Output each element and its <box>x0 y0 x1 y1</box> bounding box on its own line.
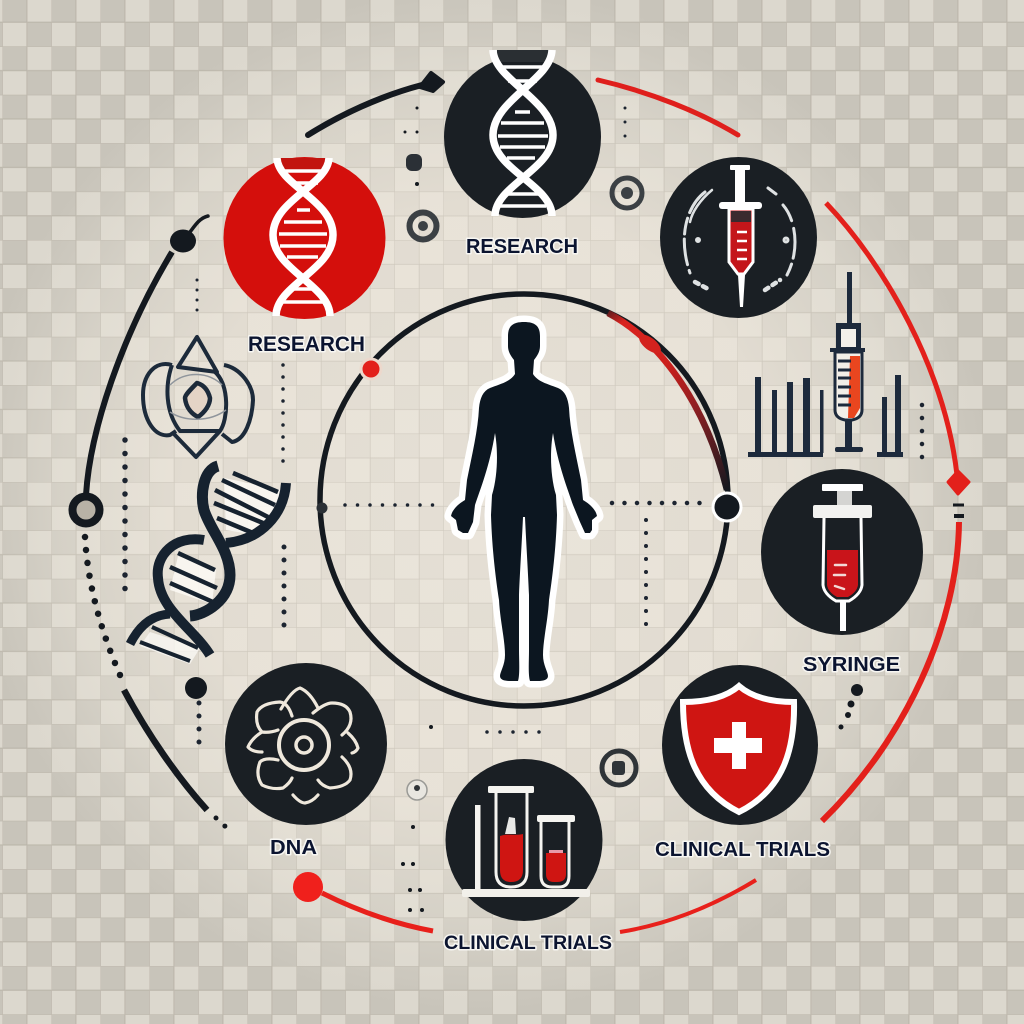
label: CLINICAL TRIALS bottom: CLINICAL TRIALS <box>444 933 612 954</box>
label: DNA: DNA <box>270 837 317 859</box>
icon: decorative dashed arcs <box>684 188 795 290</box>
icon: test tubes <box>462 786 590 897</box>
panel: red research circle with DNA <box>224 157 386 319</box>
icon: white DNA helix <box>273 158 333 316</box>
icon: syringe with red fluid <box>719 165 762 307</box>
outer arc: red bottom segments with node <box>293 872 756 932</box>
icon: outline syringe with bars <box>748 272 903 457</box>
panel: black molecule flower circle <box>225 663 387 825</box>
label: SYRINGE: SYRINGE <box>803 654 900 676</box>
panel: black shield circle <box>662 665 818 825</box>
ring node: black right <box>712 492 742 522</box>
ring node: red <box>361 359 381 379</box>
ring icon: upper right <box>612 178 642 208</box>
dotted connector lines <box>125 108 922 752</box>
outer arc: red top segment <box>598 80 738 135</box>
ring icon: lower right <box>602 751 636 785</box>
ring node: small left <box>316 502 328 514</box>
ring icon: lower small <box>407 780 427 800</box>
human figure silhouette <box>451 322 597 681</box>
label: RESEARCH top: RESEARCH <box>466 236 578 258</box>
panel: black research circle with DNA <box>444 50 601 218</box>
outer arc: red right segment with diamond node <box>822 203 969 821</box>
icon: large black DNA helix at left <box>130 466 286 664</box>
icon: white DNA helix <box>493 50 553 216</box>
outer arc: black top-left segment <box>308 73 443 135</box>
icon: flower-like molecule outline <box>248 688 358 803</box>
icon: outline molecule symbol at left <box>143 337 253 457</box>
label: RESEARCH left: RESEARCH <box>248 333 365 356</box>
icon: red shield with white cross <box>683 686 794 812</box>
small dot markers <box>185 106 863 912</box>
panel: black syringe circle upper right <box>660 157 817 318</box>
panel: black syringe circle right <box>761 469 923 635</box>
outer arc: black left segment with node <box>72 216 227 828</box>
icon: syringe with red fluid <box>813 484 872 631</box>
central ring around the human figure <box>320 294 728 706</box>
ring icon: upper left <box>410 212 436 240</box>
label: CLINICAL TRIALS right: CLINICAL TRIALS <box>655 839 830 861</box>
panel: black test tubes circle <box>446 759 602 921</box>
